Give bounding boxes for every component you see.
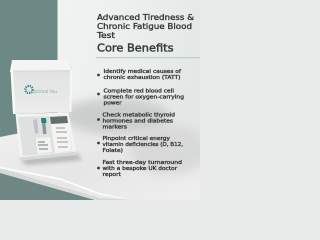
- box lid: [10, 60, 72, 114]
- bullet list: [97, 69, 184, 178]
- background: wall shading beside box: [60, 98, 170, 134]
- bullet 1: chronic exhaustion (TATT): [104, 75, 180, 81]
- bullet 3: hormones and diabetes: [102, 118, 173, 124]
- bullet 2: Complete red blood cell: [104, 88, 174, 94]
- accent divider: [96, 57, 200, 58]
- title: Test: [96, 31, 115, 40]
- bullet 4: Pinpoint critical energy: [102, 136, 170, 142]
- sachet card: [36, 137, 52, 154]
- background: lower right shading: [130, 125, 210, 175]
- bullet 1: Identify medical causes of: [104, 69, 181, 75]
- product box: [10, 60, 76, 160]
- bullet 5: report: [102, 172, 121, 178]
- text column: [96, 13, 200, 178]
- bullet 2: screen for oxygen-carrying: [104, 94, 184, 100]
- bullet 5: Fast three-day turnaround: [102, 160, 182, 166]
- background: teal below table: [0, 173, 95, 200]
- blood tube and lancet: [33, 118, 46, 134]
- background: white panel: [0, 0, 200, 200]
- title: [96, 13, 194, 40]
- background: marble table: [0, 128, 200, 200]
- background: teal wall: [0, 0, 58, 140]
- bullet 2: power: [104, 100, 122, 106]
- bullet 3: markers: [102, 124, 127, 130]
- box shadow: [20, 154, 82, 165]
- heading: core benefits: Core Benefits: [97, 42, 174, 54]
- box tray: [16, 112, 76, 160]
- bullet 1: [97, 69, 181, 81]
- bullet 3: [97, 112, 175, 130]
- bullet 5: [97, 160, 182, 178]
- background: table front edge: [0, 168, 133, 200]
- table highlight: [0, 166, 133, 200]
- logo: Optimal You: Optimal You: [31, 89, 57, 95]
- bullet 3: Check metabolic thyroid: [102, 112, 175, 118]
- bullet 4: vitamin deficiencies (D, B12,: [102, 142, 183, 148]
- title: Advanced Tiredness &: [97, 13, 194, 22]
- bullet 5: with a bespoke UK doctor: [102, 166, 178, 172]
- title: Chronic Fatigue Blood: [97, 22, 192, 31]
- instruction leaflet: [50, 116, 72, 153]
- bullet 4: Folate): [102, 148, 123, 154]
- bullet 4: [97, 136, 183, 154]
- bullet 2: [97, 88, 184, 106]
